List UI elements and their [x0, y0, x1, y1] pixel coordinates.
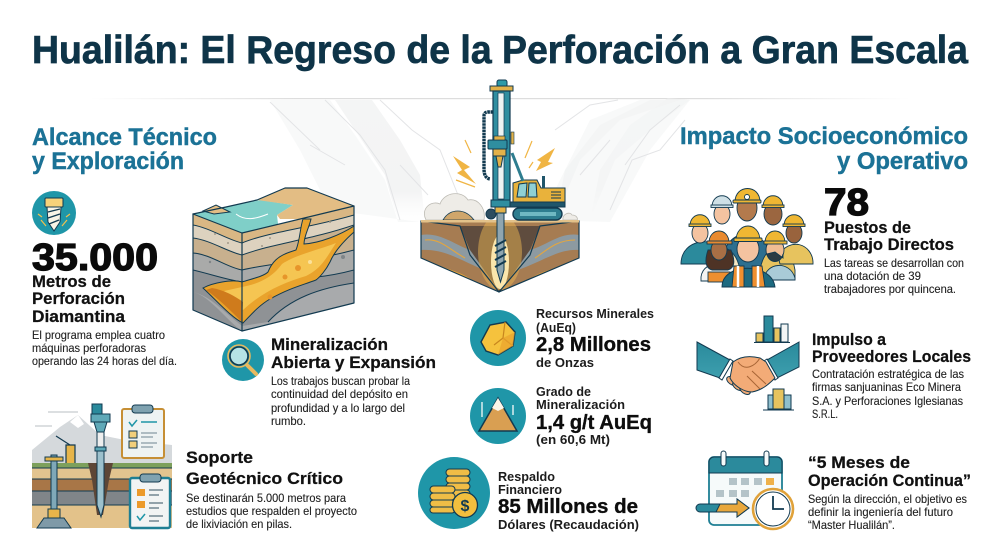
- title: Hualilán: El Regreso de la Perforación a Gran Escala: [32, 29, 968, 72]
- stat: 78 puestos: Las tareas se desarrollan con: [824, 257, 964, 270]
- stat: 78 puestos: Trabajo Directos: [824, 235, 954, 254]
- illustration: group of workers: [681, 188, 813, 287]
- illustration: handshake and buildings: [697, 316, 799, 410]
- sparks and lightning: [453, 140, 555, 187]
- stat: 35.000 metros: Metros de: [32, 272, 111, 291]
- metric: respaldo financiero: Dólares (Recaudación): [498, 518, 639, 532]
- stat: 78 puestos: 78: [824, 182, 869, 224]
- heading: impacto socioeconómico: Impacto Socioeconómico: [680, 123, 968, 150]
- metric: grado de mineralización: Grado de: [536, 385, 591, 399]
- metric: respaldo financiero: [498, 470, 639, 532]
- icon: coins: [418, 457, 490, 529]
- dust cloud: [424, 194, 577, 220]
- icon: coins: $: [461, 498, 470, 515]
- block: 5 meses de operación continua: definir la ingeniería del futuro: [808, 506, 953, 519]
- metric: recursos minerales: Recursos Minerales: [536, 307, 654, 321]
- text: programa de perforación: [32, 329, 177, 368]
- block: mineralización abierta: continuidad del depósito en: [271, 388, 408, 401]
- metric: recursos minerales: (AuEq): [536, 321, 576, 335]
- drill bit: [495, 213, 506, 282]
- illustration: geotechnical drilling with clipboards: [32, 404, 172, 528]
- block: impulso a proveedores locales: S.R.L.: [812, 408, 838, 421]
- stat: 35.000 metros: [32, 237, 158, 326]
- ground block: [421, 214, 579, 296]
- sand mound: [443, 211, 474, 220]
- icon: mineral pyramid: [470, 388, 526, 444]
- block: impulso a proveedores locales: firmas sanjuaninas Eco Minera: [812, 381, 962, 394]
- block: soporte geotécnico: [186, 448, 357, 531]
- illustration: central drilling rig: [421, 80, 579, 296]
- stat: 35.000 metros: 35.000: [32, 237, 158, 279]
- stat: 78 puestos: [824, 182, 964, 296]
- metric: recursos minerales: 2,8 Millones: [536, 334, 651, 356]
- metric: recursos minerales: [536, 307, 654, 370]
- icon: lower clipboard: [130, 474, 170, 528]
- block: mineralización abierta: rumbo.: [271, 415, 306, 428]
- metric: grado de mineralización: Mineralización: [536, 398, 625, 412]
- block: impulso a proveedores locales: Proveedores Locales: [812, 347, 971, 366]
- panel: alcance técnico y exploración: [32, 124, 436, 531]
- panel: impacto socioeconómico y operativo: [680, 123, 971, 532]
- heading: impacto socioeconómico: y Operativo: [837, 148, 968, 175]
- metric: recursos minerales: de Onzas: [536, 356, 594, 370]
- text: programa de perforación: operando las 24 horas del día.: [32, 355, 177, 368]
- block: mineralización abierta: Abierta y Expansión: [271, 353, 436, 372]
- block: impulso a proveedores locales: Contratación estratégica de las: [812, 368, 964, 381]
- icon: upper clipboard: [122, 405, 164, 458]
- block: soporte geotécnico: Soporte: [186, 448, 253, 467]
- heading: alcance técnico: Alcance Técnico: [32, 124, 217, 151]
- block: soporte geotécnico: de lixiviación en pilas.: [186, 518, 292, 531]
- stat: 78 puestos: Puestos de: [824, 218, 911, 237]
- block: 5 meses de operación continua: “5 Meses de: [808, 453, 910, 472]
- hose: [484, 112, 493, 179]
- icon: gold nugget: [470, 310, 526, 366]
- block: soporte geotécnico: estudios que respalden el proyecto: [186, 505, 357, 518]
- block: 5 meses de operación continua: “Master Hualilán”.: [808, 519, 895, 532]
- metric: grado de mineralización: (en 60,6 Mt): [536, 433, 610, 447]
- block: mineralización abierta: profundidad y a lo largo del: [271, 402, 405, 415]
- panel: central metrics: [418, 307, 654, 532]
- block: 5 meses de operación continua: [808, 453, 971, 532]
- block: mineralización abierta: Los trabajos buscan probar la: [271, 375, 410, 388]
- block: mineralización abierta: [271, 335, 436, 428]
- metric: respaldo financiero: Financiero: [498, 483, 562, 497]
- metric: grado de mineralización: [536, 385, 652, 447]
- block: soporte geotécnico: Geotécnico Crítico: [186, 469, 343, 488]
- metric: grado de mineralización: 1,4 g/t AuEq: [536, 412, 652, 434]
- text: programa de perforación: El programa emplea cuatro: [32, 329, 165, 342]
- stat: 78 puestos: una dotación de 39: [824, 270, 921, 283]
- illustration: geological block with gold vein: [193, 188, 354, 340]
- stat: 35.000 metros: Perforación: [32, 289, 125, 308]
- block: impulso a proveedores locales: [812, 330, 971, 421]
- heading: impacto socioeconómico: [680, 123, 968, 175]
- text: programa de perforación: máquinas perforadoras: [32, 342, 146, 355]
- background: grey mountains: [270, 98, 690, 222]
- track and excavator body: [486, 153, 565, 220]
- block: 5 meses de operación continua: Según la dirección, el objetivo es: [808, 493, 967, 506]
- stat: 35.000 metros: Diamantina: [32, 307, 126, 326]
- icon: calendar and clock: [696, 451, 793, 529]
- metric: respaldo financiero: Respaldo: [498, 470, 555, 484]
- metric: respaldo financiero: 85 Millones de: [498, 496, 638, 518]
- block: mineralización abierta: Mineralización: [271, 335, 388, 354]
- icon: magnifying glass: [222, 339, 264, 381]
- heading: alcance técnico: y Exploración: [32, 148, 184, 175]
- block: impulso a proveedores locales: Impulso a: [812, 330, 886, 349]
- heading: alcance técnico: [32, 124, 217, 175]
- block: soporte geotécnico: Se destinarán 5.000 metros para: [186, 492, 347, 505]
- mast: [488, 80, 514, 213]
- block: impulso a proveedores locales: S.A. y Perforaciones Iglesianas: [812, 395, 963, 408]
- stat: 78 puestos: trabajadores por quincena.: [824, 283, 956, 296]
- icon: drill bit: [32, 191, 76, 235]
- block: 5 meses de operación continua: Operación Continua”: [808, 471, 971, 490]
